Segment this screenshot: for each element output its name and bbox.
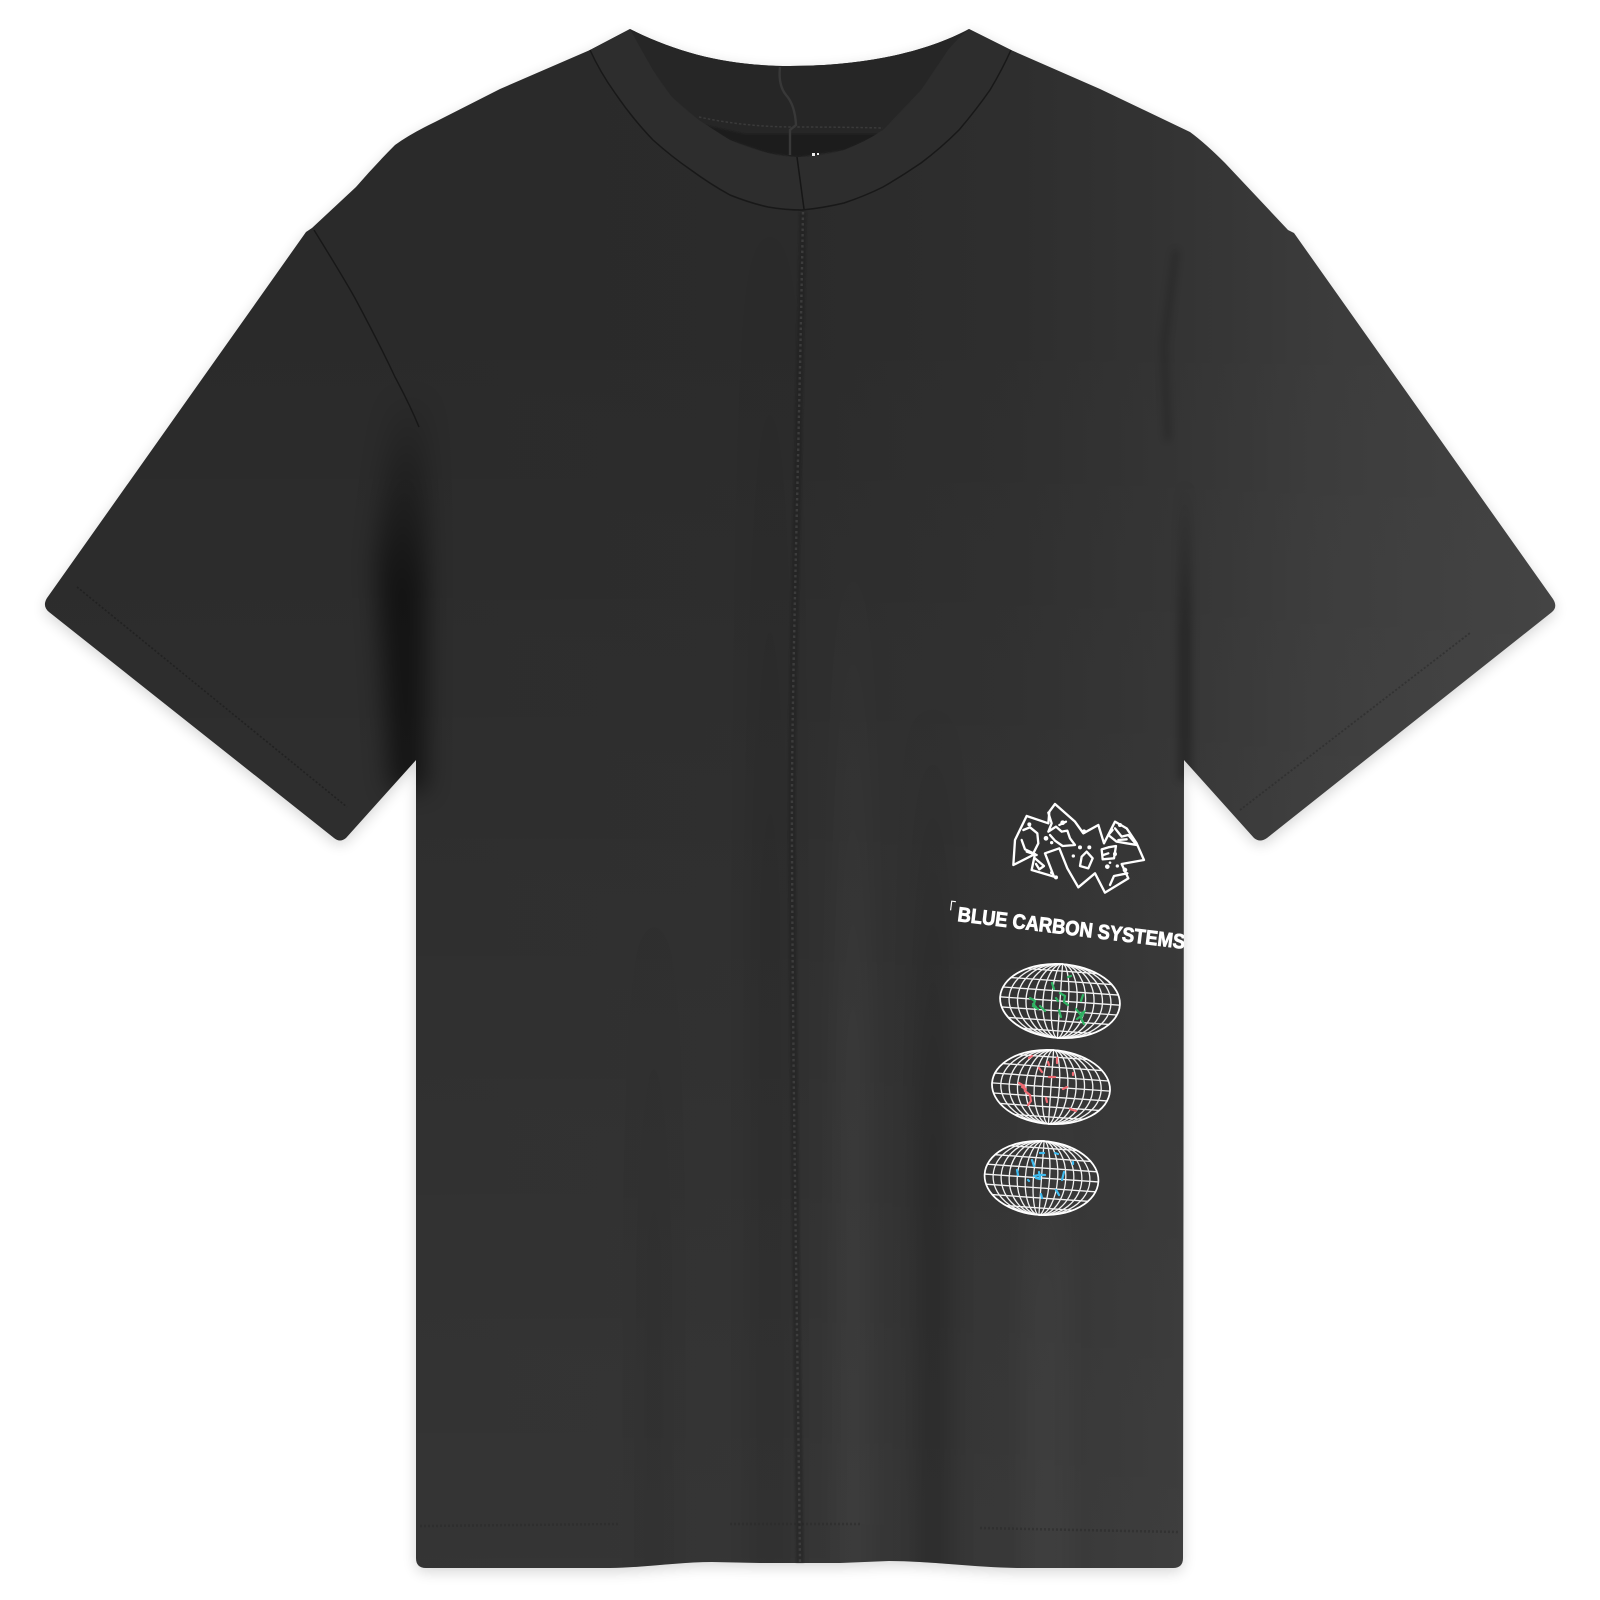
ribbed collar band xyxy=(590,29,1011,210)
neck label dots xyxy=(812,153,819,156)
globe: green xyxy=(998,960,1122,1042)
back collar stitch xyxy=(699,117,883,128)
blue map specks xyxy=(1017,1153,1073,1198)
center front seam xyxy=(792,212,803,1563)
back collar seam loop xyxy=(780,67,796,155)
right sleeve hem stitch xyxy=(1240,633,1470,810)
bracket mark: 「 xyxy=(940,899,956,918)
back neck shadow xyxy=(699,124,883,157)
fabric folds and shading xyxy=(376,470,1190,1568)
red map specks xyxy=(1019,1056,1076,1111)
icon: folded world map outline xyxy=(1013,804,1144,893)
inside back neck xyxy=(630,29,969,157)
collar outer seam xyxy=(590,50,1011,210)
green map specks xyxy=(1030,976,1084,1024)
left sleeve hem stitch xyxy=(77,587,347,807)
globe: red xyxy=(989,1046,1113,1128)
globe: blue xyxy=(982,1137,1101,1219)
bottom hem stitch xyxy=(420,1524,1178,1532)
collar center seam xyxy=(797,157,804,209)
sleeve seam: left xyxy=(314,230,419,427)
chest graphic print xyxy=(940,804,1186,1219)
brand text: BLUE CARBON SYSTEMS xyxy=(956,903,1186,954)
